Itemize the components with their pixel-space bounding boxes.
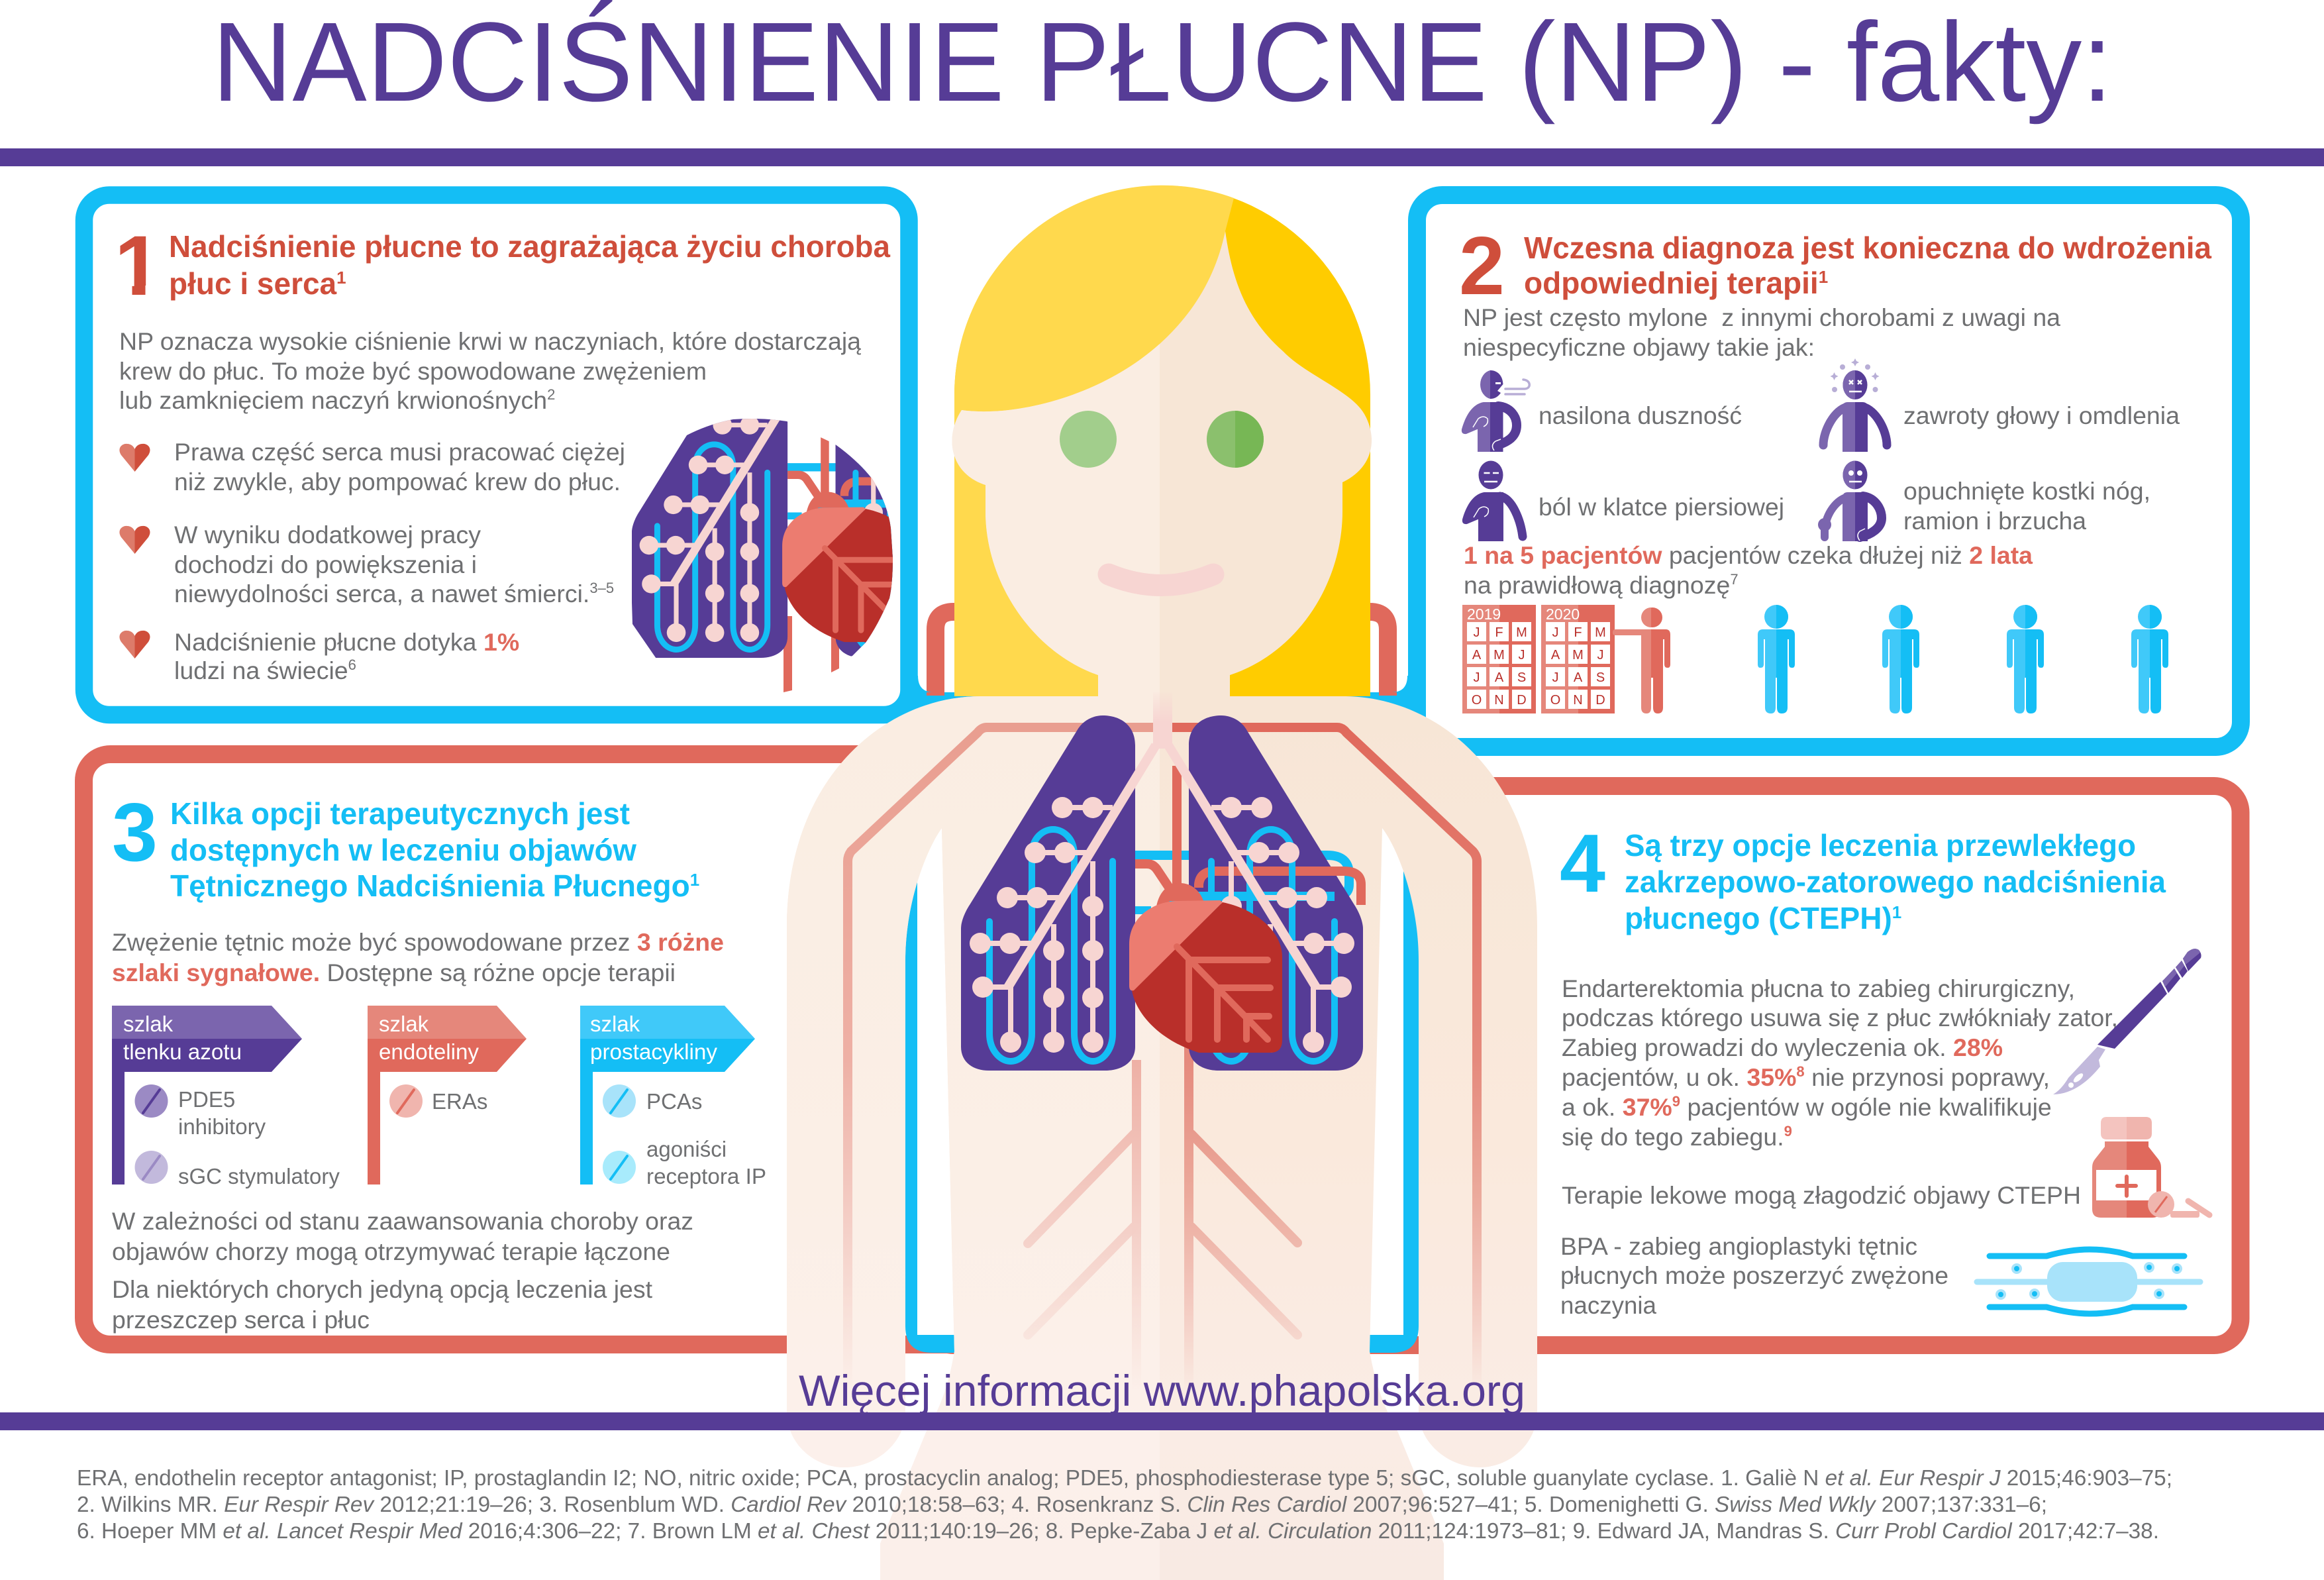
icon: blue person 1	[1758, 605, 1795, 713]
BPA text: naczynia	[1560, 1291, 1656, 1319]
closing text: objawów chorzy mogą otrzymywać terapie łączone	[112, 1238, 670, 1265]
pathway flag: prostacyclin: prostacykliny	[590, 1039, 718, 1064]
pill sGC	[135, 1151, 168, 1184]
calendar 2020: J	[1552, 670, 1559, 685]
icon: angioplasty	[1977, 1249, 2200, 1314]
intro text: niespecyficzne objawy takie jak:	[1463, 333, 1815, 361]
calendar 2019: M	[1516, 625, 1527, 640]
panel 3 content	[112, 787, 766, 1334]
heading 2	[1524, 231, 2211, 300]
intro text: Zwężenie tętnic może być spowodowane przez 3 różne	[112, 928, 724, 956]
pill PDE5	[135, 1084, 168, 1118]
pathway flag: nitric oxide	[112, 1006, 302, 1185]
connector corners	[901, 676, 1426, 692]
heading 4: płucnego (CTEPH)	[1625, 901, 1892, 935]
label PDE5: PDE5	[178, 1087, 235, 1112]
statistic text: na prawidłową diagnozę	[1464, 571, 1730, 599]
icon: blue person 2	[1882, 605, 1919, 713]
calendar 2019: J	[1473, 670, 1480, 685]
label: ramion i brzucha	[1903, 507, 2086, 535]
icon: blue person 4	[2131, 605, 2168, 713]
BPA text	[1560, 1232, 1948, 1319]
label	[1903, 477, 2150, 535]
pathway flag: endothelin: endoteliny	[379, 1039, 479, 1064]
heading 4: 1	[1892, 902, 1901, 922]
panel 2 content	[1459, 221, 2211, 713]
heading 3: dostępnych w leczeniu objawów	[170, 833, 636, 867]
footnotes: 2. Wilkins MR. Eur Respir Rev 2012;21:19–26; 3. Rosenblum WD. Cardiol Rev 2010;18:58–63; 4. Rosenkranz S. Clin Res Cardiol 2007;96:527–41; 5. Domenighetti G. Swiss Med Wkly 2007;137:331–6;	[77, 1492, 2047, 1516]
statistic text: 7	[1730, 571, 1739, 588]
label ERAs: ERAs	[432, 1089, 487, 1114]
calendar 2019: O	[1472, 693, 1482, 708]
central blue frame	[905, 795, 1419, 1353]
label: nasilona duszność	[1539, 401, 1742, 429]
panel frame 4	[927, 786, 2241, 1345]
label PDE5	[178, 1087, 266, 1139]
intro text: NP jest często mylone z innymi chorobami z uwagi na	[1463, 303, 2060, 331]
blue connector between top panels	[901, 692, 1425, 724]
bottom band	[0, 1412, 2324, 1430]
body text: 8	[1796, 1063, 1805, 1080]
calendar 2020: F	[1574, 625, 1582, 640]
bullet 1: niż zwykle, aby pompować krew do płuc.	[174, 468, 621, 496]
icon: swollen person	[1818, 461, 1882, 541]
body text: pacjentów, u ok. 35%	[1562, 1063, 1796, 1091]
pathway flag: nitric oxide: tlenku azotu	[123, 1039, 242, 1064]
heading 2: 1	[1819, 267, 1828, 287]
panel frame 1	[84, 195, 909, 715]
heading 3: Kilka opcji terapeutycznych jest	[170, 796, 630, 831]
drug therapy text: Terapie lekowe mogą złagodzić objawy CTEPH	[1562, 1181, 2081, 1209]
body text: pacjentów w ogóle nie kwalifikuje	[1680, 1093, 2052, 1121]
panel frame 2	[1417, 195, 2241, 747]
body text	[1562, 974, 2118, 1151]
heading 1: 1	[336, 268, 346, 288]
body text: podczas którego usuwa się z płuc zwłókniały zator,	[1562, 1004, 2118, 1031]
footnotes: 6. Hoeper MM et al. Lancet Respir Med 2016;4:306–22; 7. Brown LM et al. Chest 2011;140:19–26; 8. Pepke-Zaba J et al. Circulation 2011;124:1973–81; 9. Edward JA, Mandras S. Curr Probl Cardiol 2017;42:7–38.	[77, 1518, 2159, 1543]
number 3: 3	[112, 787, 158, 878]
pathway flag: endothelin: szlak	[379, 1012, 429, 1036]
calendar 2019: D	[1517, 693, 1527, 708]
icon: heart 1	[119, 444, 150, 472]
body text: Zabieg prowadzi do wyleczenia ok. 28%	[1562, 1033, 2003, 1061]
body text: nie przynosi poprawy,	[1805, 1063, 2050, 1091]
lungs and heart	[961, 715, 1363, 1071]
icon: blue person 3	[2007, 605, 2044, 713]
calendar 2020: A	[1574, 670, 1583, 685]
pathway flag: endothelin	[368, 1006, 527, 1185]
heading 1: Nadciśnienie płucne to zagrażająca życiu choroba	[169, 229, 890, 264]
mouth	[1109, 574, 1213, 586]
calendar 2020: S	[1596, 670, 1605, 685]
bullet 2	[174, 521, 614, 607]
icon: medicine bottle	[2092, 1117, 2209, 1218]
heading 1	[169, 229, 890, 301]
intro text: NP oznacza wysokie ciśnienie krwi w naczyniach, które dostarczają	[119, 327, 861, 355]
central figure	[787, 185, 1537, 1580]
heading 3: 1	[690, 870, 699, 890]
calendar 2020	[1541, 605, 1615, 713]
calendar 2019: A	[1495, 670, 1504, 685]
title: NADCIŚNIENIE PŁUCNE (NP) - fakty:	[212, 0, 2113, 125]
label IP	[646, 1137, 766, 1188]
number 1: 1	[115, 219, 162, 313]
calendar 2020: O	[1550, 693, 1560, 708]
closing text: Dla niektórych chorych jedyną opcją leczenia jest	[112, 1275, 653, 1303]
number 4: 4	[1560, 818, 1605, 910]
heading 4: Są trzy opcje leczenia przewlekłego	[1625, 828, 2136, 863]
bullet 3: 6	[348, 657, 356, 673]
calendar 2019: S	[1517, 670, 1526, 685]
heading 4	[1625, 828, 2166, 935]
pathway flag: prostacyclin	[580, 1006, 755, 1185]
calendar 2019: A	[1472, 648, 1482, 662]
pill ERAs	[389, 1084, 423, 1118]
panel frame 3	[83, 754, 1408, 1345]
top band	[0, 148, 2324, 166]
BPA text: płucnych może poszerzyć zwężone	[1560, 1261, 1948, 1289]
bullet 2: niewydolności serca, a nawet śmierci.	[174, 580, 589, 607]
intro text: lub zamknięciem naczyń krwionośnych	[119, 386, 547, 414]
calendar 2019: 2019	[1467, 606, 1501, 623]
label PCAs: PCAs	[646, 1089, 702, 1114]
bullet 3: Nadciśnienie płucne dotyka 1%	[174, 628, 519, 656]
intro text	[112, 928, 724, 986]
number 2: 2	[1459, 221, 1505, 312]
pill IP	[603, 1151, 636, 1184]
eye right	[1207, 411, 1264, 468]
calendar 2020: 2020	[1546, 606, 1580, 623]
bullet 1	[174, 438, 625, 496]
bullet 2: dochodzi do powiększenia i	[174, 551, 477, 578]
BPA text: BPA - zabieg angioplastyki tętnic	[1560, 1232, 1917, 1260]
calendar 2019: F	[1495, 625, 1503, 640]
hair	[954, 185, 1370, 696]
bullet 2: 3–5	[589, 580, 614, 596]
pathway flag: prostacyclin: szlak	[590, 1012, 640, 1036]
heading 3: Tętnicznego Nadciśnienia Płucnego	[170, 869, 690, 903]
calendar 2019	[1462, 605, 1536, 713]
vessels left	[848, 727, 1156, 1391]
label PDE5: inhibitory	[178, 1114, 266, 1139]
heading 4: zakrzepowo-zatorowego nadciśnienia	[1625, 865, 2166, 899]
illustration: mini heart and lungs	[632, 419, 893, 692]
calendar 2020: J	[1552, 625, 1559, 640]
calendar 2020: M	[1595, 625, 1606, 640]
label IP: receptora IP	[646, 1164, 766, 1188]
intro text: szlaki sygnałowe. Dostępne są różne opcje terapii	[112, 959, 676, 986]
closing text: W zależności od stanu zaawansowania choroby oraz	[112, 1207, 693, 1235]
panel 4 content	[1560, 818, 2209, 1319]
icon: heart 2	[119, 526, 150, 554]
label sGC: sGC stymulatory	[178, 1164, 340, 1188]
heading 2: odpowiedniej terapii	[1524, 266, 1819, 300]
calendar 2020: D	[1595, 693, 1605, 708]
closing text: przeszczep serca i płuc	[112, 1306, 370, 1334]
body text: się do tego zabiegu.	[1562, 1123, 1784, 1151]
heading 3	[170, 796, 699, 903]
label: opuchnięte kostki nóg,	[1903, 477, 2150, 505]
statistic text: 1 na 5 pacjentów pacjentów czeka dłużej niż 2 lata	[1464, 541, 2033, 569]
intro text: krew do płuc. To może być spowodowane zwężeniem	[119, 357, 707, 385]
calendar 2020: A	[1551, 648, 1560, 662]
bullet 2: W wyniku dodatkowej pracy	[174, 521, 481, 549]
bullet 1: Prawa część serca musi pracować ciężej	[174, 438, 625, 466]
label IP: agoniści	[646, 1137, 727, 1161]
body text: 9	[1784, 1123, 1792, 1139]
statistic text	[1464, 541, 2033, 599]
icon: scalpel	[2053, 949, 2201, 1094]
trachea	[1153, 692, 1172, 749]
calendar 2019: J	[1518, 648, 1525, 662]
intro text	[119, 327, 861, 414]
pathway flag: nitric oxide: szlak	[123, 1012, 174, 1036]
calendar 2020: M	[1572, 648, 1584, 662]
label: ból w klatce piersiowej	[1539, 493, 1784, 521]
website link: Więcej informacji www.phapolska.org	[799, 1366, 1525, 1415]
footnotes: ERA, endothelin receptor antagonist; IP, prostaglandin I2; NO, nitric oxide; PCA, prostacyclin analog; PDE5, phosphodiesterase type 5; sGC, soluble guanylate cyclase. 1. Galiè N et al. Eur Respir J 2015;46:903–75;	[77, 1465, 2172, 1490]
vessels right	[1172, 727, 1477, 1391]
intro text	[1463, 303, 2060, 361]
calendar 2019: N	[1494, 693, 1504, 708]
bullet 3: ludzi na świecie	[174, 657, 348, 684]
icon: chest pain person	[1462, 461, 1523, 541]
body text: 9	[1672, 1093, 1680, 1110]
calendar 2019: M	[1493, 648, 1505, 662]
footnotes	[77, 1465, 2172, 1543]
heading 2: Wczesna diagnoza jest konieczna do wdrożenia	[1524, 231, 2211, 265]
calendar 2020: J	[1597, 648, 1604, 662]
body text: a ok. 37%	[1562, 1093, 1672, 1121]
intro text: 2	[547, 386, 555, 403]
panel 1 content	[119, 235, 893, 692]
icon: breathless person	[1462, 370, 1529, 452]
closing text	[112, 1207, 693, 1334]
pill PCAs	[603, 1084, 636, 1118]
icon: red person	[1613, 607, 1670, 713]
red neck loop	[935, 612, 1388, 696]
icon: heart 3	[119, 631, 150, 658]
label: zawroty głowy i omdlenia	[1903, 401, 2180, 429]
body	[787, 696, 1537, 1580]
body text: Endarterektomia płucna to zabieg chirurgiczny,	[1562, 974, 2075, 1002]
heading 1: płuc i serca	[169, 266, 336, 301]
bullet 3	[174, 628, 519, 684]
eye left	[1060, 411, 1117, 468]
face	[952, 231, 1372, 702]
calendar 2019: J	[1473, 625, 1480, 640]
calendar 2020: N	[1573, 693, 1583, 708]
white backing of centre frame	[917, 762, 1403, 1335]
icon: dizzy person	[1823, 358, 1887, 452]
